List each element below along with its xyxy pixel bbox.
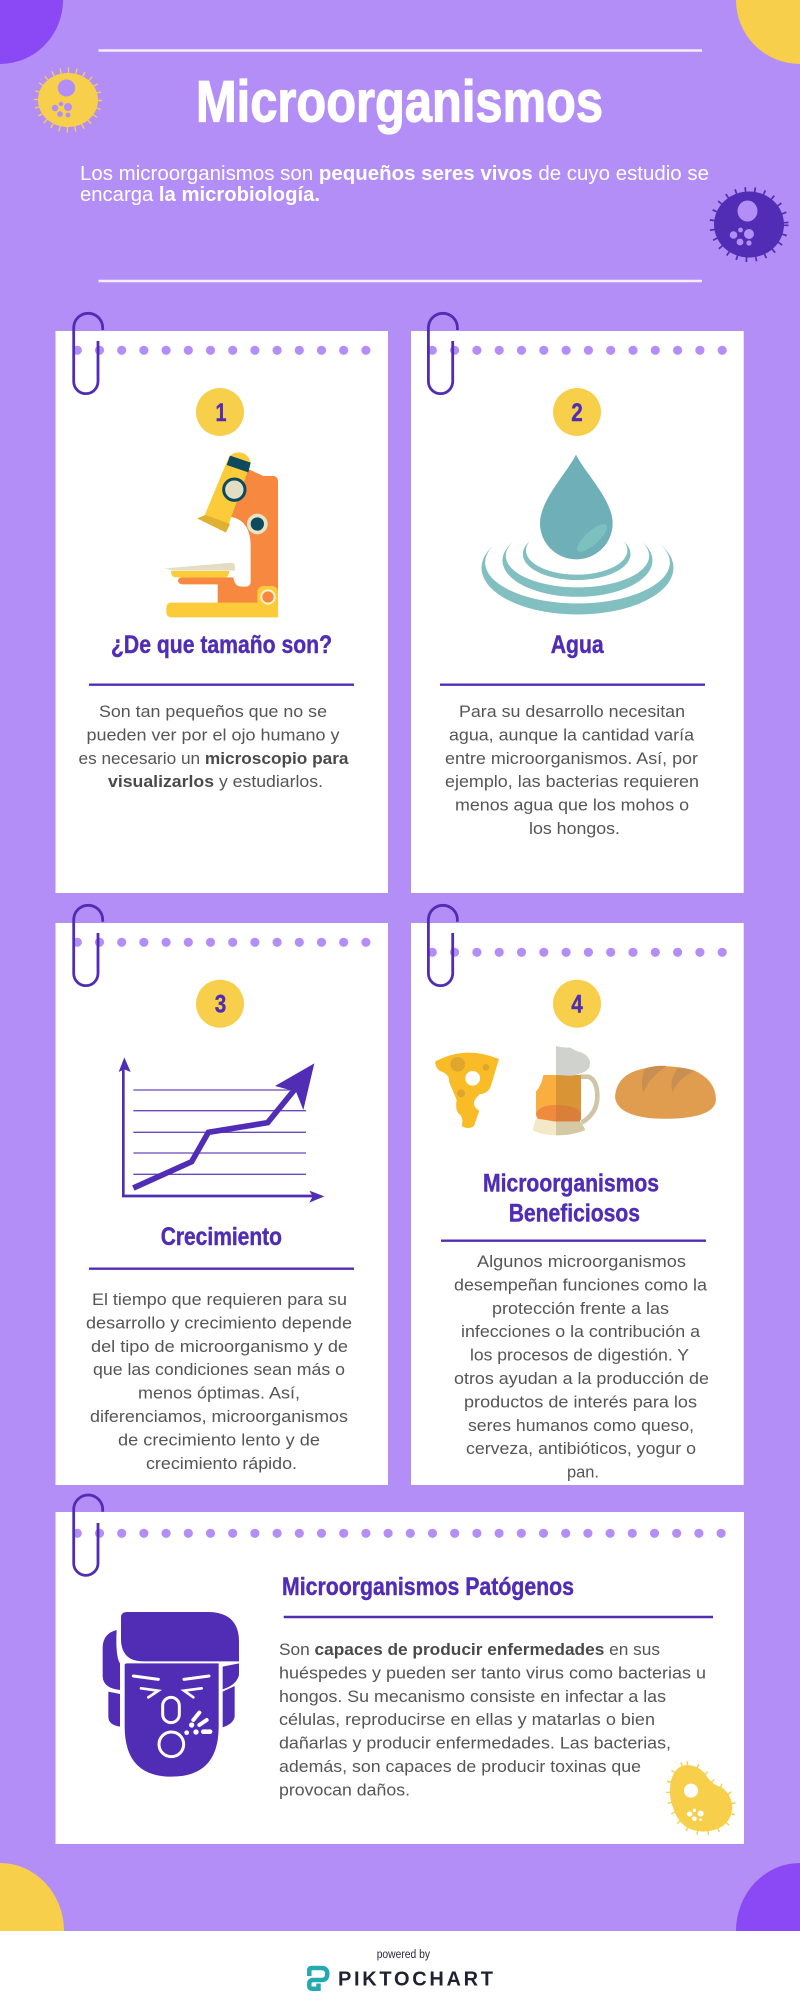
card 5 body text: Son capaces de producir enfermedades en sus bbox=[279, 1640, 660, 1659]
binder holes bbox=[77, 346, 367, 355]
card 5 body text: células, reproducirse en ellas y matarlas o bien bbox=[279, 1710, 655, 1729]
card 2 heading: Agua bbox=[551, 631, 605, 659]
card 2 body text: menos agua que los mohos o bbox=[455, 796, 689, 815]
card 1 body text: es necesario un microscopio para bbox=[78, 749, 349, 768]
card 3 body text: desarrollo y crecimiento depende bbox=[86, 1313, 352, 1332]
card 2 body text bbox=[445, 702, 699, 838]
footer: powered by Piktochart: PIKTOCHART bbox=[338, 1969, 493, 1991]
number badge 4: 4 bbox=[571, 990, 583, 1018]
panel: card 2 water bbox=[411, 313, 744, 893]
card 1 body text: visualizarlos y estudiarlos. bbox=[108, 772, 323, 791]
icon: paper clip bbox=[428, 313, 457, 394]
card 2 body text: los hongos. bbox=[529, 819, 620, 838]
card 2 body text: entre microorganismos. Así, por bbox=[445, 749, 698, 768]
card 1 heading: ¿De que tamaño son? bbox=[111, 631, 332, 659]
card 5 body text: huéspedes y pueden ser tanto virus como bacterias u bbox=[279, 1663, 706, 1682]
card 4 body text bbox=[454, 1252, 709, 1482]
card 3 body text: que las condiciones sean más o bbox=[93, 1360, 345, 1379]
intro text: encarga la microbiología. bbox=[80, 184, 320, 206]
number badge 3: 3 bbox=[215, 990, 226, 1018]
card 1 body text: Son tan pequeños que no se bbox=[99, 702, 327, 721]
icon: water drop bbox=[481, 455, 673, 615]
card 4 body text: protección frente a las bbox=[492, 1299, 669, 1318]
icon: paper clip bbox=[74, 905, 103, 986]
icon: yellow bacterium bbox=[670, 1765, 732, 1832]
card 3 body text: crecimiento rápido. bbox=[146, 1454, 297, 1473]
icon: microscope bbox=[165, 452, 278, 617]
icon: Piktochart logo bbox=[309, 1968, 327, 1989]
card 4 body text: otros ayudan a la producción de bbox=[454, 1369, 709, 1388]
card 5 body text bbox=[279, 1640, 706, 1799]
icon: paper clip bbox=[428, 905, 457, 986]
number badge 1: 1 bbox=[216, 399, 227, 427]
intro text: Los microorganismos son pequeños seres vivos de cuyo estudio se bbox=[80, 163, 709, 185]
number badge 3 bbox=[196, 980, 244, 1028]
card 4 body text: los procesos de digestión. Y bbox=[470, 1346, 689, 1365]
card 5 body text: hongos. Su mecanismo consiste en infectar a las bbox=[279, 1687, 666, 1706]
card 4 heading: Beneficiosos bbox=[509, 1200, 640, 1228]
number badge 4 bbox=[553, 980, 601, 1028]
footer: powered by Piktochart: powered by bbox=[377, 1949, 430, 1961]
corner circle: bottom left bbox=[0, 1863, 64, 1999]
title: Microorganismos bbox=[196, 70, 603, 135]
card 3 body text: menos óptimas. Así, bbox=[138, 1384, 300, 1403]
card 2 body text: agua, aunque la cantidad varía bbox=[449, 725, 695, 744]
panel: card 3 growth bbox=[56, 905, 388, 1485]
icon: dark purple microbe bbox=[712, 190, 786, 260]
icon: cheese, beer and bread bbox=[435, 1046, 716, 1135]
corner circle: bottom right bbox=[736, 1863, 800, 1999]
card 3 heading: Crecimiento bbox=[161, 1223, 282, 1251]
icon: paper clip bbox=[74, 1495, 103, 1575]
card 4 body text: Algunos microorganismos bbox=[477, 1252, 686, 1271]
number badge 2 bbox=[553, 388, 601, 436]
card 4 body text: productos de interés para los bbox=[464, 1392, 697, 1411]
binder holes bbox=[432, 948, 723, 957]
icon: sick face bbox=[103, 1612, 239, 1777]
card 3 body text bbox=[86, 1290, 352, 1473]
binder holes bbox=[77, 938, 367, 947]
binder holes bbox=[77, 1529, 728, 1538]
card 3 body text: El tiempo que requieren para su bbox=[92, 1290, 347, 1309]
card 4 heading: Microorganismos bbox=[483, 1170, 659, 1198]
card 3 body text: diferenciamos, microorganismos bbox=[90, 1407, 348, 1426]
corner circle: top right bbox=[736, 0, 800, 64]
panel: card 4 beneficial bbox=[411, 905, 744, 1485]
card 2 body text: ejemplo, las bacterias requieren bbox=[445, 772, 699, 791]
card 4 body text: pan. bbox=[567, 1463, 599, 1482]
card 4 heading bbox=[483, 1170, 659, 1228]
card 3 body text: del tipo de microorganismo y de bbox=[91, 1337, 348, 1356]
card 4 body text: infecciones o la contribución a bbox=[461, 1322, 701, 1341]
card 4 body text: cerveza, antibióticos, yogur o bbox=[466, 1439, 696, 1458]
number badge 1 bbox=[196, 388, 244, 436]
card 1 body text bbox=[78, 702, 349, 791]
card 4 body text: desempeñan funciones como la bbox=[454, 1275, 708, 1294]
card 4 body text: seres humanos como queso, bbox=[468, 1416, 694, 1435]
card 5 body text: dañarlas y producir enfermedades. Las bacterias, bbox=[279, 1734, 671, 1753]
card 5 body text: provocan daños. bbox=[279, 1780, 410, 1799]
card 5 body text: además, son capaces de producir toxinas que bbox=[279, 1757, 641, 1776]
intro text bbox=[80, 163, 709, 206]
footer: powered by Piktochart bbox=[309, 1949, 493, 1991]
card 5 heading: Microorganismos Patógenos bbox=[282, 1573, 574, 1601]
panel: card 5 pathogens bbox=[56, 1495, 744, 1844]
line chart: growth bbox=[119, 1057, 324, 1203]
icon: yellow microbe bbox=[37, 70, 99, 130]
binder holes bbox=[432, 346, 723, 355]
card 2 body text: Para su desarrollo necesitan bbox=[459, 702, 685, 721]
corner circle: top left bbox=[0, 0, 63, 64]
icon: paper clip bbox=[74, 313, 103, 394]
panel: card 1 size bbox=[56, 313, 388, 893]
number badge 2: 2 bbox=[571, 399, 583, 427]
card 3 body text: de crecimiento lento y de bbox=[118, 1430, 320, 1449]
card 1 body text: pueden ver por el ojo humano y bbox=[86, 725, 340, 744]
